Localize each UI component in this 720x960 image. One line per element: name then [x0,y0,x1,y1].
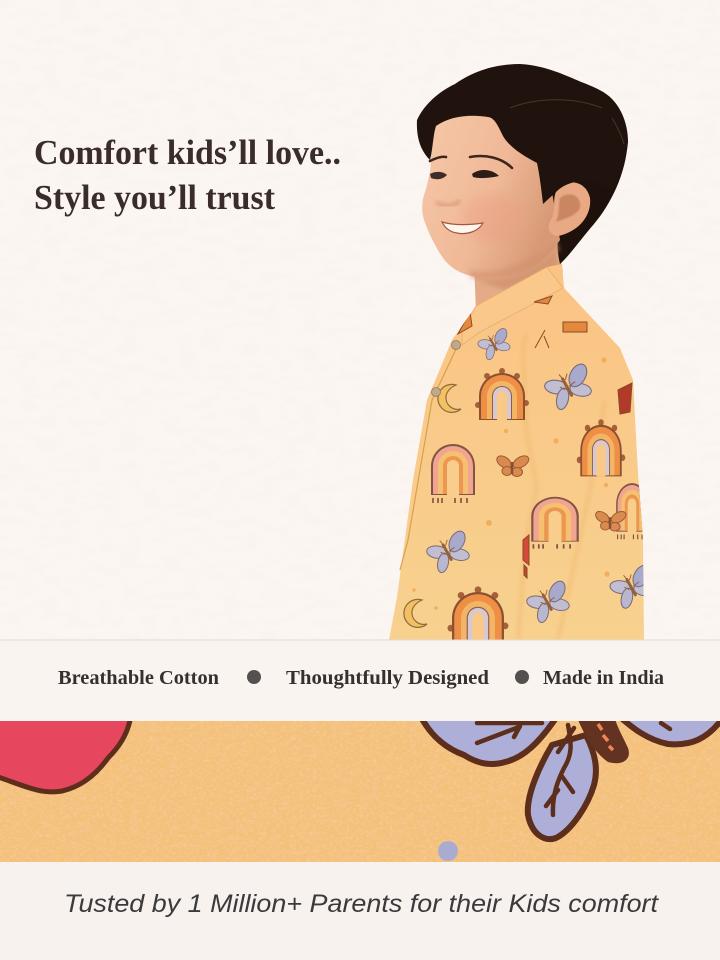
strip top rule [0,640,720,641]
tagline: Tusted by 1 Million+ Parents for their Kids comfort [64,890,659,918]
shirt body [389,264,644,640]
butterfly right wing [620,721,720,748]
neck [474,240,563,312]
fabric weave light [0,721,720,862]
feature: breathable cotton: Breathable Cotton [58,667,219,689]
cheek blush [463,194,523,242]
bullet [247,670,261,684]
polka dots [412,357,610,610]
ear [549,182,590,236]
smile [442,222,483,234]
nose [436,200,460,206]
neck shadow [478,252,560,290]
lilac dot [438,841,458,861]
feature: thoughtfully designed: Thoughtfully Designed [286,667,489,689]
boy photo illustration [389,64,655,645]
moons [404,384,461,627]
face [422,105,560,279]
hair [417,64,628,204]
placket line [400,345,458,570]
wing veins [477,723,670,815]
shoulder prints [458,296,632,578]
back hair [540,140,628,264]
strip background [0,640,720,721]
shirt prints [404,296,655,645]
butterfly lower wing [528,735,596,839]
heading [34,133,341,217]
red print [0,715,131,792]
heading: Style you’ll trust [34,178,275,217]
butterfly left wing [420,715,558,764]
fabric close-up band [0,715,720,862]
tagline panel [0,862,720,960]
eye left [430,172,447,179]
bullet [515,670,529,684]
sleeve shading [518,335,605,640]
feature strip [0,640,720,721]
ear inner [556,194,580,222]
hair shine [510,100,624,144]
heading: Comfort kids’ll love.. [34,133,341,172]
rainbows [431,368,648,645]
paper texture [0,0,720,640]
collar [462,267,563,345]
buttons [432,340,460,396]
orange butterflies [495,453,628,531]
jaw shadow [470,240,560,279]
fabric weave dark [0,721,720,862]
brows [430,156,512,168]
butterfly body [578,721,629,764]
butterflies [426,326,655,624]
tagline background [0,862,720,960]
fabric base [0,721,720,862]
eye right [472,170,499,178]
feature: made in india: Made in India [543,667,664,689]
body stripes [598,724,613,750]
